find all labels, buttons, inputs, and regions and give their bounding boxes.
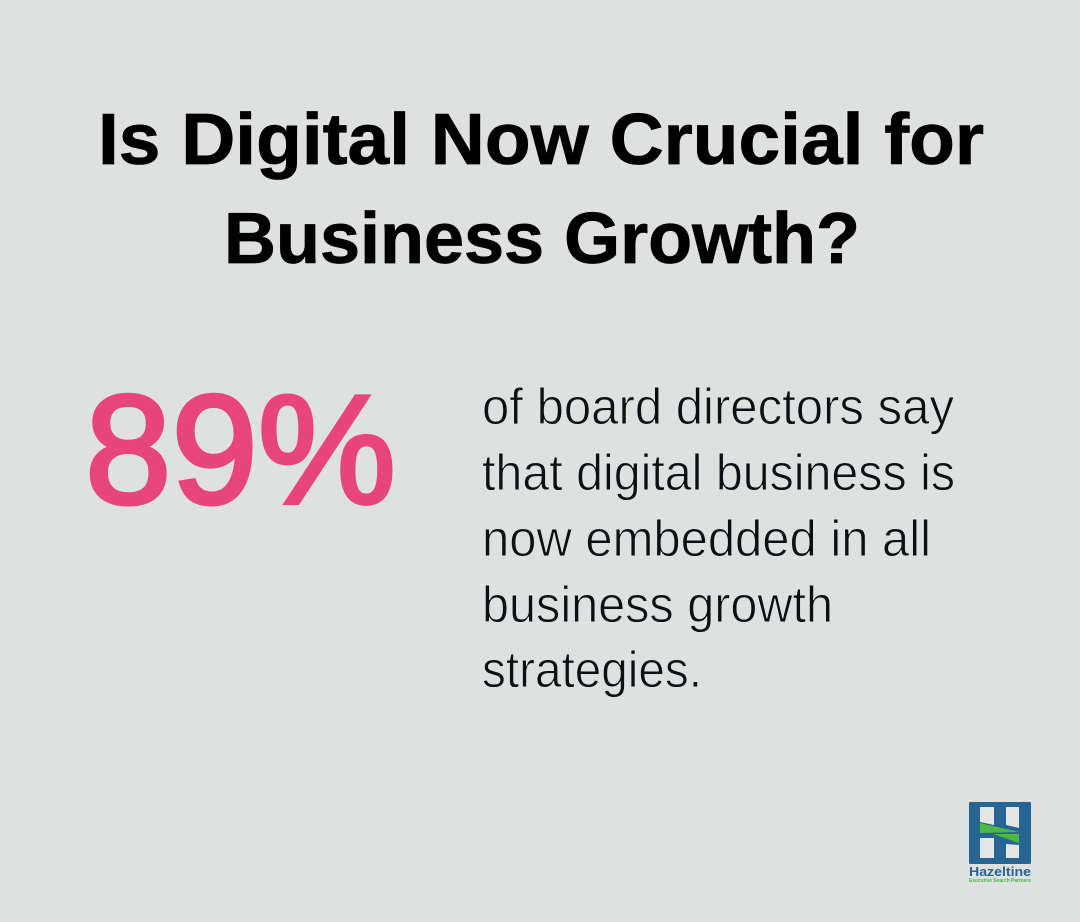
icon: Hazeltine logo: Executive Search Partners [969,878,1031,884]
description text: strategies. [482,641,702,698]
description text [482,378,955,698]
description text: that digital business is [482,444,955,501]
description text: now embedded in all [482,510,931,567]
description text: business growth [482,576,833,633]
title: Is Digital Now Crucial for [98,100,984,180]
icon: Hazeltine logo: Hazeltine [969,864,1031,879]
big statistic: 89%: 89% [85,363,396,536]
title: Business Growth? [224,199,860,279]
icon: Hazeltine logo [969,802,1031,884]
title [98,100,984,279]
description text: of board directors say [482,378,954,435]
